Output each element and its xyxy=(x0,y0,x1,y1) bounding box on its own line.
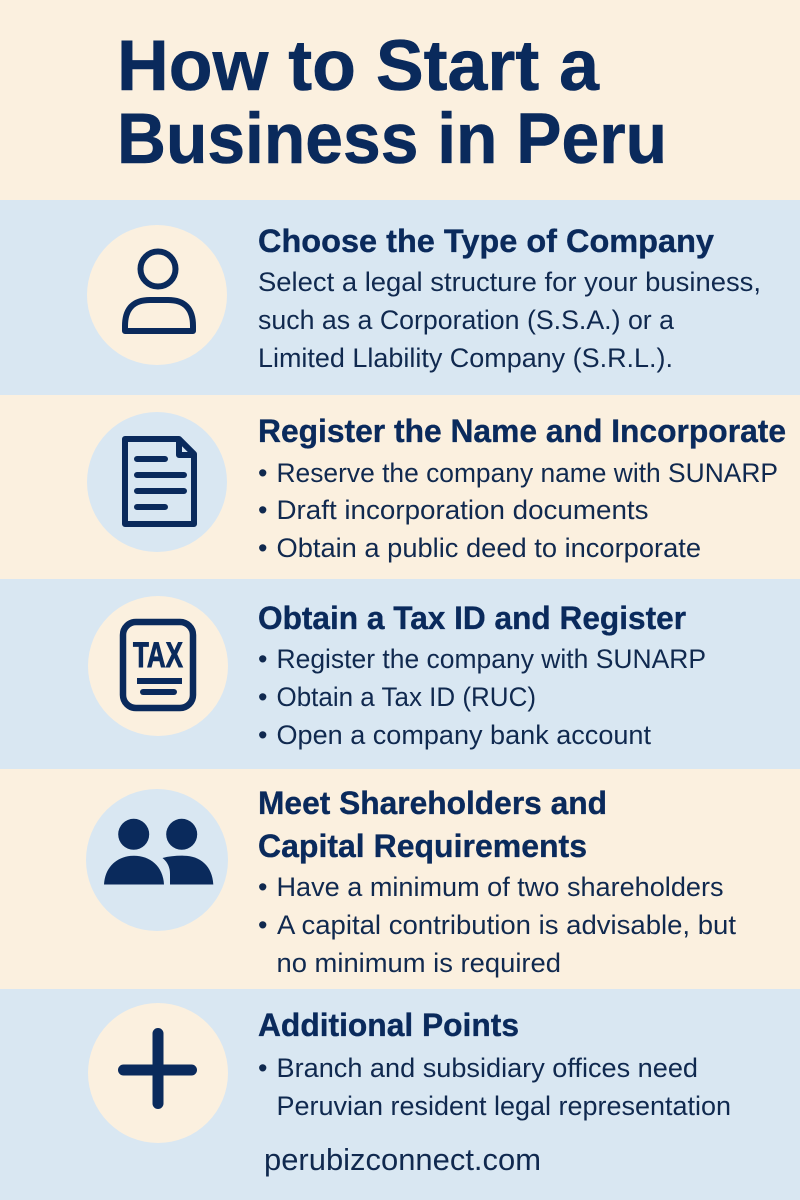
bullet list: registration steps: Reserve the company name with SUNARP xyxy=(276,458,778,488)
heading: tax id: Obtain a Tax ID and Register xyxy=(258,600,686,636)
heading: additional points: Additional Points xyxy=(258,1007,519,1043)
icon: document xyxy=(87,412,227,552)
bullet list: tax steps: • xyxy=(258,682,267,712)
heading: shareholders and capital xyxy=(258,785,607,864)
bullet list: registration steps: Obtain a public deed to incorporate xyxy=(276,533,701,563)
bullet list: registration steps: • xyxy=(258,533,267,563)
panel: shareholders and capital xyxy=(0,769,800,989)
bullet list: shareholder requirements: • xyxy=(258,872,267,902)
title: How to Start a xyxy=(117,27,600,106)
heading: register the name: Register the Name and Incorporate xyxy=(258,413,786,449)
bullet list: tax steps: Register the company with SUNARP xyxy=(276,644,706,674)
bullet list: additional points: • xyxy=(258,1053,267,1083)
bullet list: registration steps: • xyxy=(258,495,267,525)
heading: choose the type of company: Choose the Type of Company xyxy=(258,223,714,259)
icon: tax form xyxy=(88,596,228,736)
bullet list: shareholder requirements: • xyxy=(258,910,267,940)
panel: additional points xyxy=(0,989,800,1200)
bullet list: registration steps: • xyxy=(258,458,267,488)
bullet list: tax steps: Obtain a Tax ID (RUC) xyxy=(276,682,536,712)
text block: legal structure: Select a legal structure for your business, xyxy=(258,267,761,297)
text block: legal structure: Limited Llability Company (S.R.L.). xyxy=(258,343,673,373)
bullet list: registration steps xyxy=(258,458,778,563)
icon: tax form: TAX xyxy=(133,636,183,675)
bullet list: tax steps: • xyxy=(258,720,267,750)
icon: plus xyxy=(88,1003,228,1143)
bullet list: shareholder requirements: Have a minimum of two shareholders xyxy=(276,872,724,902)
bullet list: additional points xyxy=(258,1053,731,1121)
text block: legal structure xyxy=(258,267,761,373)
bullet list: additional points: Branch and subsidiary offices need xyxy=(276,1053,698,1083)
panel: obtain a tax id xyxy=(0,579,800,769)
bullet list: shareholder requirements: no minimum is required xyxy=(276,948,561,978)
heading: shareholders and capital: Capital Requirements xyxy=(258,828,587,864)
title: Business in Peru xyxy=(117,100,667,179)
text block: legal structure: such as a Corporation (S.S.A.) or a xyxy=(258,305,675,335)
bullet list: registration steps: Draft incorporation documents xyxy=(276,495,648,525)
bullet list: additional points: Peruvian resident legal representation xyxy=(276,1091,731,1121)
bullet list: shareholder requirements: A capital contribution is advisable, but xyxy=(277,910,736,940)
bullet list: tax steps xyxy=(258,644,706,750)
icon: two people xyxy=(86,789,228,931)
icon: person xyxy=(87,225,227,365)
title xyxy=(117,27,667,179)
bullet list: tax steps: • xyxy=(258,644,267,674)
website: perubizconnect.com xyxy=(264,1142,541,1177)
bullet list: shareholder requirements xyxy=(258,872,736,978)
panel: choose the type of company xyxy=(0,200,800,395)
heading: shareholders and capital: Meet Shareholders and xyxy=(258,785,607,821)
panel: register the name and incorporate xyxy=(0,395,800,579)
bullet list: tax steps: Open a company bank account xyxy=(276,720,651,750)
